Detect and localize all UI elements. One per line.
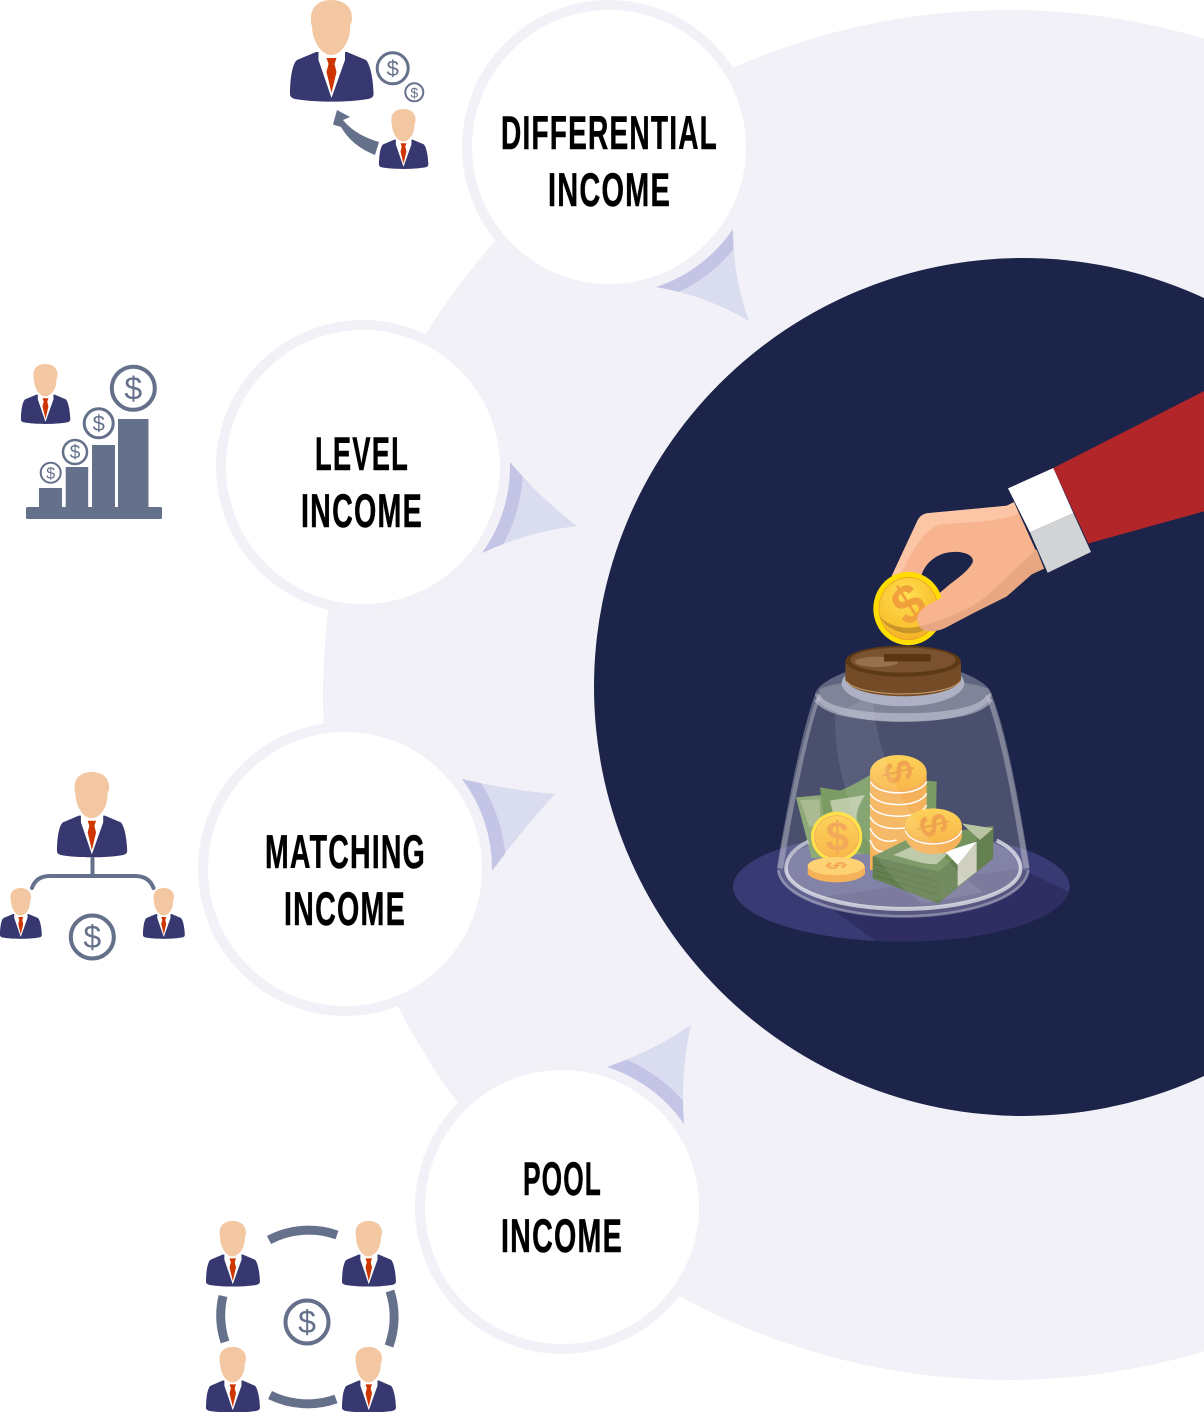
heading: level income: INCOME: [301, 484, 423, 537]
jar lid: [845, 646, 961, 696]
panel: differential income circle: [462, 0, 756, 294]
flat gold coin: [808, 857, 865, 882]
heading: pool income: INCOME: [501, 1209, 623, 1262]
panel: matching income circle: [198, 722, 492, 1016]
upright gold coin: [811, 812, 862, 862]
arrow: level to centre: [482, 462, 576, 553]
panel: central dark circle: [594, 258, 1204, 1116]
thumb: [917, 539, 1044, 631]
icon: differential income people: $: [387, 56, 399, 81]
heading: level income: [301, 427, 423, 537]
back banknotes: [796, 775, 937, 858]
heading: differential income: [501, 106, 718, 216]
icon: pool income ring: [206, 1221, 396, 1412]
jar glass highlights: [778, 694, 1028, 916]
jar base shadow: [733, 841, 1070, 942]
money inside the jar: [796, 755, 993, 903]
shirt cuff: [1008, 468, 1091, 573]
icon: level income bars: $: [46, 465, 55, 482]
jar neck: [815, 660, 992, 722]
upright gold coin: $: [826, 813, 849, 860]
icon: level income bars: $: [124, 370, 142, 406]
arrow: pool to centre: [607, 1025, 691, 1124]
coin stack: [870, 755, 927, 870]
icon: level income bars: [21, 364, 162, 519]
arrow: differential to centre: [656, 229, 749, 321]
icon: pool income ring: $: [298, 1304, 316, 1340]
icon: differential income people: [290, 0, 428, 169]
heading: pool income: [501, 1152, 623, 1262]
right gold coin: [905, 808, 962, 854]
heading: pool income: POOL: [523, 1152, 602, 1205]
arrow: matching to centre: [462, 779, 555, 871]
gold coin in fingers: $: [881, 570, 936, 639]
heading: matching income: INCOME: [284, 882, 406, 935]
jar glass back: [777, 679, 1029, 917]
icon: level income bars: $: [93, 411, 105, 436]
heading: matching income: [265, 825, 426, 935]
hand back and index finger: [892, 502, 1044, 626]
right gold coin: $: [909, 809, 957, 841]
hand opening: [922, 552, 973, 598]
icon: level income bars: $: [70, 442, 81, 464]
heading: matching income: MATCHING: [265, 825, 426, 878]
illustration: hand dropping coin into money jar: [733, 391, 1204, 944]
hand, coin, lid and sleeve: [845, 391, 1204, 696]
heading: differential income: DIFFERENTIAL: [501, 106, 718, 159]
panel: level income circle: [216, 320, 510, 614]
coin stack: $: [874, 756, 922, 788]
heading: level income: LEVEL: [315, 427, 409, 480]
heading: differential income: INCOME: [548, 163, 671, 216]
hand highlight: [892, 502, 1018, 576]
panel: pool income circle: [415, 1060, 709, 1354]
banknote brick: [873, 823, 993, 903]
background: large pale circle: [323, 10, 1204, 1380]
icon: differential income people: $: [410, 84, 418, 100]
red sleeve: [1053, 391, 1204, 543]
flat gold coin: $: [818, 861, 853, 870]
icon: matching income tree: [0, 772, 185, 958]
icon: matching income tree: $: [83, 919, 101, 955]
